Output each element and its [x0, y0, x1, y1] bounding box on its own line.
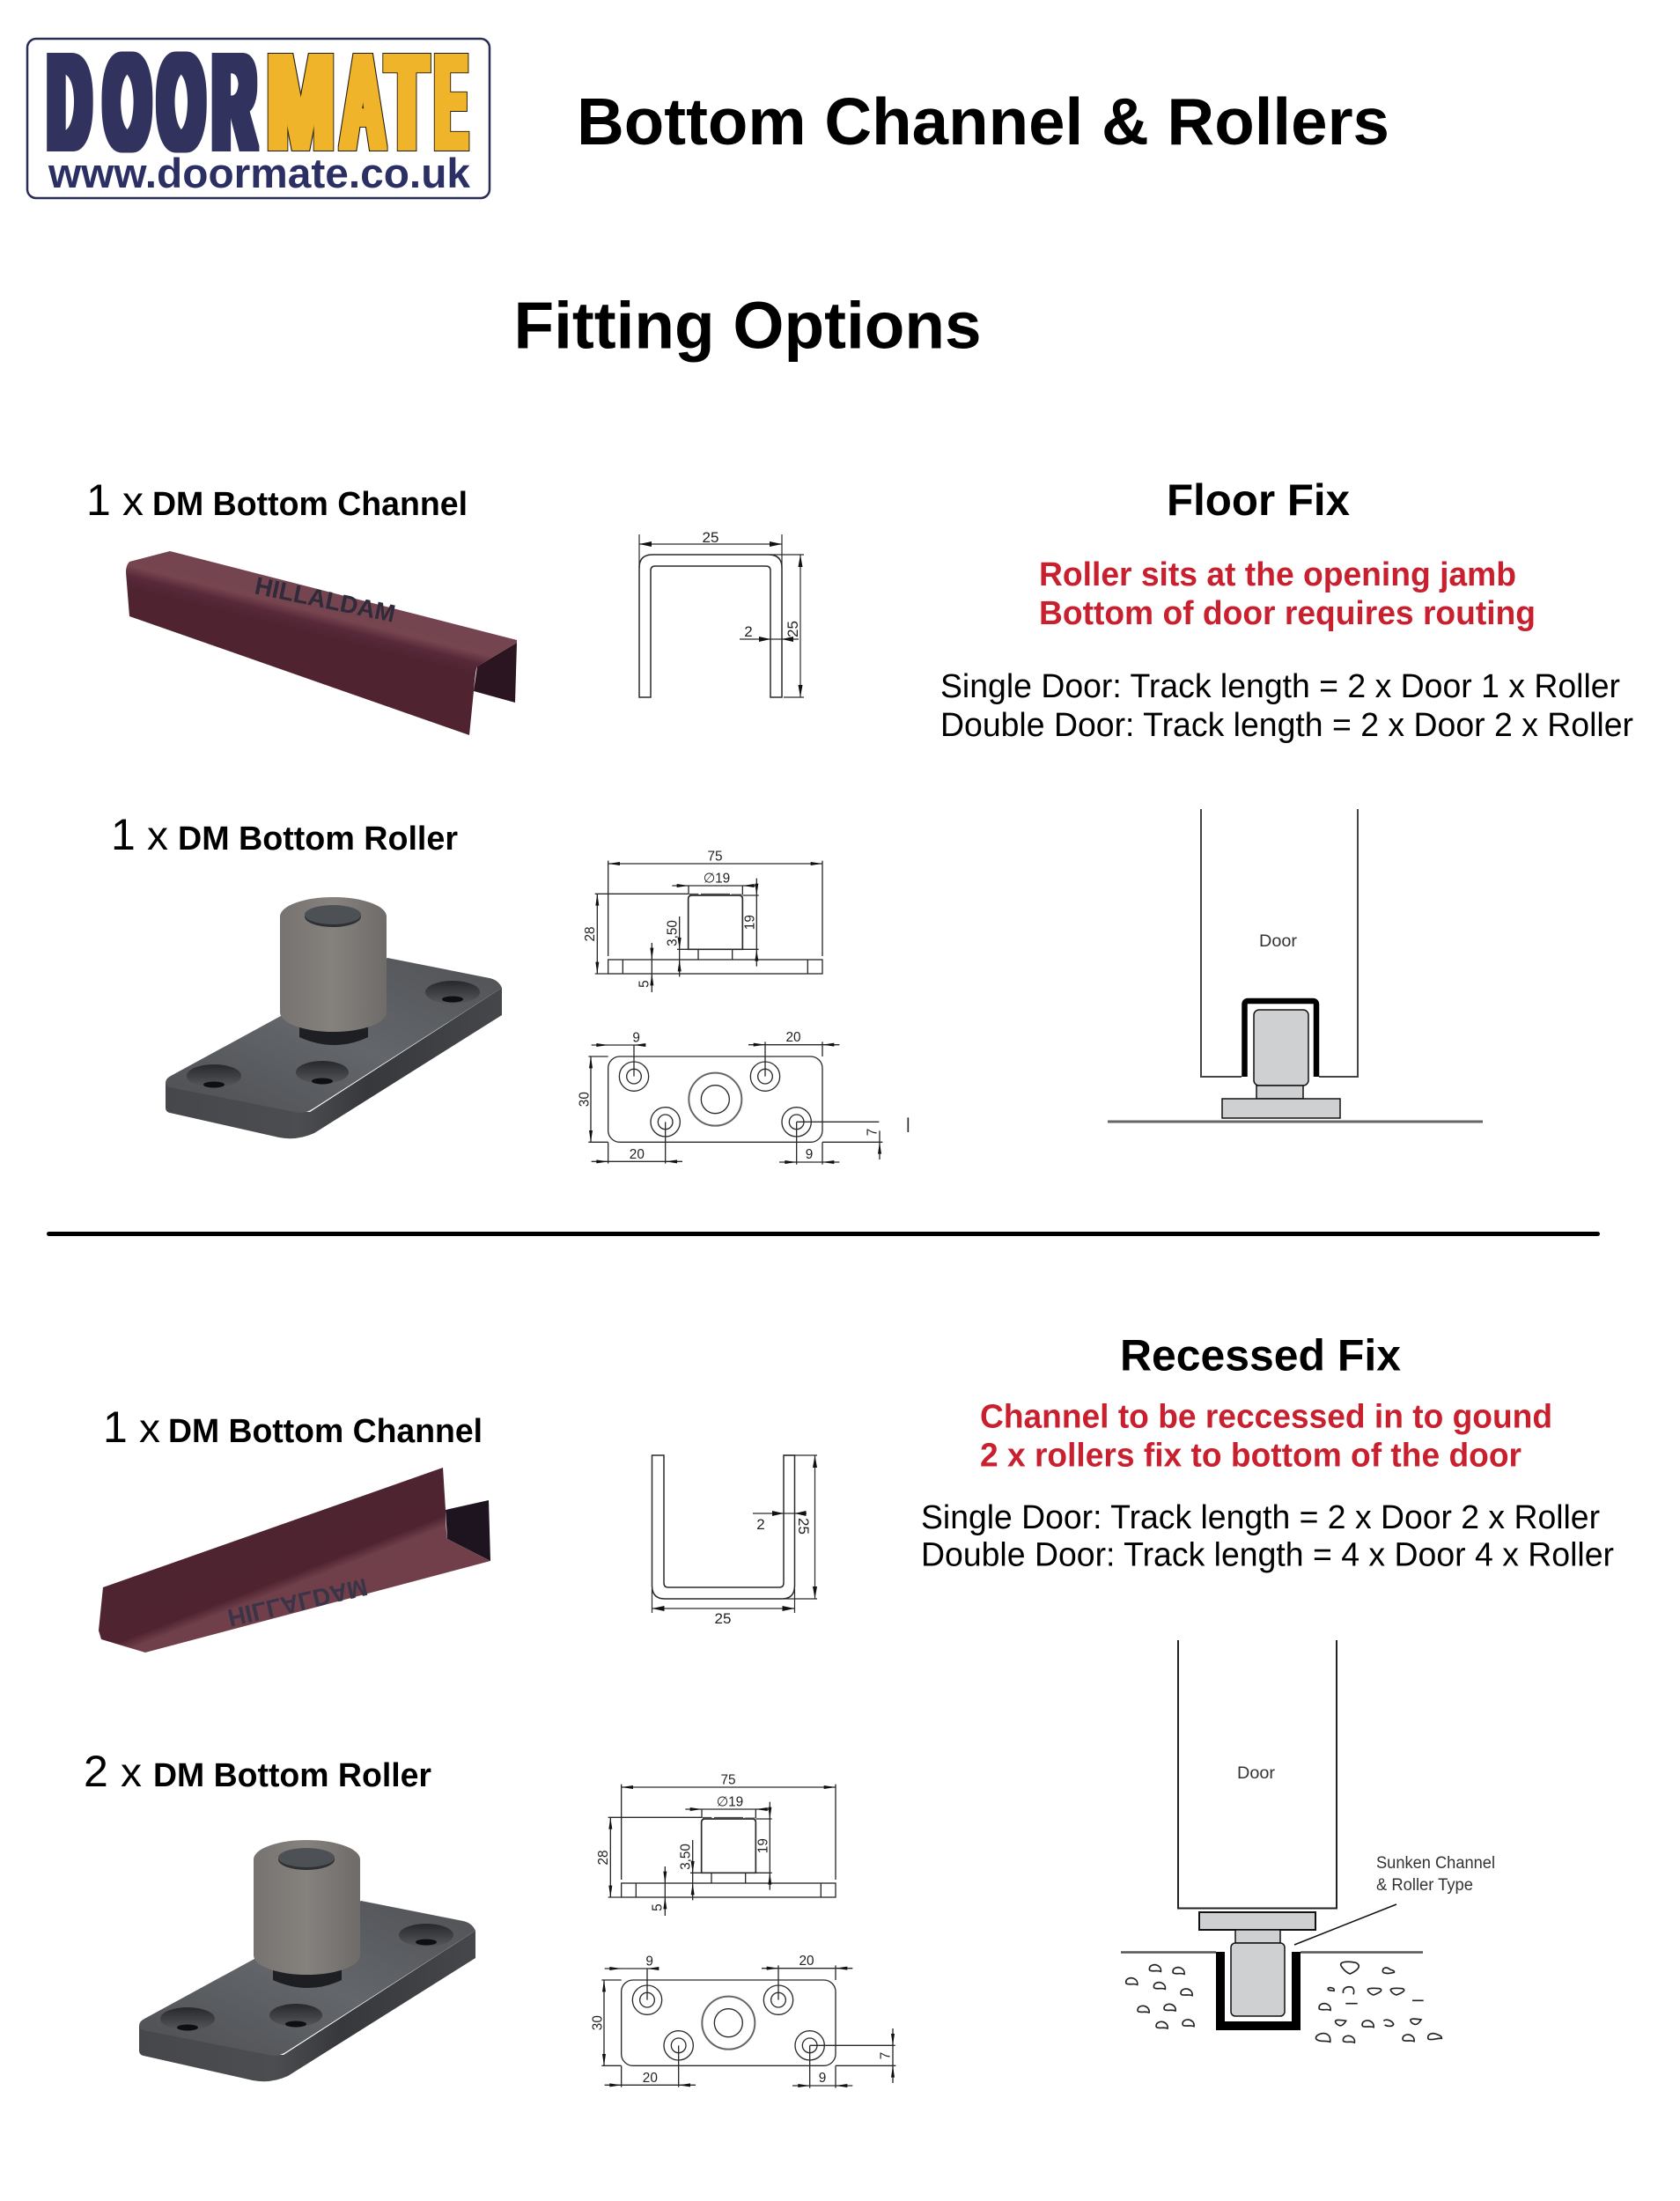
track length notes: Double Door: Track length = 4 x Door 4 x Roller — [921, 1537, 1614, 1574]
channel photo: HILLALDAM — [253, 572, 398, 628]
roller dimension drawings: ∅19 — [717, 1795, 743, 1810]
roller dimension drawings: 9 — [632, 1031, 640, 1046]
red notes: Channel to be reccessed in to gound — [980, 1398, 1552, 1435]
roller dimension drawings: 3,50 — [678, 1844, 693, 1870]
roller dimension drawings: 3,50 — [665, 920, 680, 946]
label: 1 x DM Bottom Channel: DM Bottom Channel — [152, 486, 468, 523]
channel photo: HILLALDAM — [225, 1573, 370, 1631]
heading: recessed fix: Recessed Fix — [1120, 1331, 1401, 1380]
roller dimension drawings: 30 — [590, 2015, 605, 2030]
logo word: MATE: T — [387, 26, 427, 178]
roller dimension drawings: 20 — [630, 1147, 645, 1162]
logo url: www.doormate.co.uk — [48, 150, 471, 196]
roller dimension drawings: 20 — [785, 1030, 801, 1045]
heading: floor fix: Floor Fix — [1167, 475, 1350, 525]
panel: recessed fix parts — [84, 1402, 895, 2088]
roller dimension drawings: 75 — [707, 850, 723, 865]
label: 1 x DM Bottom Channel — [86, 475, 468, 525]
roller dimension drawings: 5 — [637, 980, 652, 988]
roller dimension drawings: 19 — [742, 915, 757, 930]
label: 1 x DM Bottom Roller — [111, 810, 458, 859]
panel: floor fix description — [940, 475, 1633, 1122]
roller dimension drawings: 9 — [819, 2071, 826, 2086]
label: 1 x DM Bottom Channel: 1 — [103, 1402, 128, 1452]
roller dimension drawings: 19 — [755, 1838, 770, 1853]
label: 1 x DM Bottom Roller: x — [147, 813, 168, 858]
ground pebbles — [1126, 1962, 1441, 2043]
label: 2 x DM Bottom Roller: x — [121, 1749, 142, 1795]
title: Bottom Channel & Rollers — [577, 85, 1389, 158]
roller dimension drawings: 28 — [596, 1850, 611, 1866]
red notes — [980, 1398, 1552, 1474]
roller dimension drawings: 9 — [645, 1954, 653, 1969]
channel photo — [99, 1468, 490, 1653]
track length notes: Single Door: Track length = 2 x Door 2 x Roller — [921, 1499, 1600, 1536]
label: 1 x DM Bottom Channel: x — [122, 478, 144, 524]
roller photo — [139, 1840, 475, 2081]
channel section drawing — [639, 529, 804, 697]
channel section drawing: 25 — [715, 1610, 731, 1627]
panel: recessed fix description — [921, 1331, 1614, 2043]
roller dimension drawings: 7 — [866, 1129, 881, 1136]
logo word: MATE: A — [342, 26, 384, 179]
roller dimension drawings: 20 — [799, 1954, 814, 1969]
red notes: Roller sits at the opening jamb — [1039, 556, 1516, 593]
label: 1 x DM Bottom Channel — [103, 1402, 483, 1452]
logo word: MATE: M — [268, 26, 334, 178]
roller dimension drawings: 30 — [577, 1092, 592, 1107]
track length notes — [921, 1499, 1614, 1574]
logo word: MATE — [268, 26, 466, 179]
recessed fix diagram — [1121, 1640, 1495, 2043]
channel section drawing — [652, 1455, 817, 1627]
logo word: MATE: E — [436, 27, 466, 179]
roller dimension drawings: 28 — [583, 926, 598, 942]
red notes: 2 x rollers fix to bottom of the door — [980, 1437, 1522, 1474]
roller photo — [166, 897, 502, 1138]
channel section drawing: 25 — [795, 1518, 812, 1535]
logo — [27, 26, 490, 198]
label: 1 x DM Bottom Roller: DM Bottom Roller — [178, 821, 458, 858]
roller dimension drawings — [577, 850, 908, 1165]
label: 1 x DM Bottom Roller: 1 — [111, 810, 136, 859]
callout: sunken channel — [1376, 1854, 1495, 1895]
roller dimension drawings: 20 — [643, 2071, 658, 2086]
roller dimension drawings: 9 — [806, 1147, 813, 1162]
door label: Door — [1237, 1764, 1276, 1783]
floor fix diagram — [1108, 809, 1483, 1122]
divider — [47, 1232, 1600, 1236]
channel section drawing: 2 — [744, 623, 753, 640]
callout: sunken channel: Sunken Channel — [1376, 1854, 1495, 1873]
roller dimension drawings — [590, 1773, 895, 2088]
track length notes — [940, 668, 1633, 744]
track length notes: Double Door: Track length = 2 x Door 2 x Roller — [940, 707, 1633, 744]
heading: fitting options: Fitting Options — [514, 289, 981, 363]
roller dimension drawings: ∅19 — [704, 872, 730, 887]
label: 2 x DM Bottom Roller: 2 — [84, 1747, 108, 1796]
roller dimension drawings: 5 — [650, 1903, 665, 1911]
door label: Door — [1259, 932, 1298, 951]
label: 1 x DM Bottom Channel: DM Bottom Channel — [168, 1413, 483, 1450]
track length notes: Single Door: Track length = 2 x Door 1 x Roller — [940, 668, 1620, 705]
red notes: Bottom of door requires routing — [1039, 595, 1536, 632]
channel section drawing: 25 — [703, 529, 718, 546]
label: 1 x DM Bottom Channel: 1 — [86, 475, 111, 525]
logo word: DOOR: DOOR — [48, 27, 255, 179]
callout: sunken channel: & Roller Type — [1376, 1876, 1473, 1895]
roller dimension drawings: 7 — [879, 2052, 894, 2059]
panel: floor fix parts — [86, 475, 908, 1165]
label: 1 x DM Bottom Channel: x — [139, 1405, 160, 1451]
channel section drawing: 25 — [785, 621, 801, 637]
channel photo — [126, 551, 517, 735]
channel section drawing: 2 — [756, 1516, 765, 1533]
red notes — [1039, 556, 1536, 632]
label: 2 x DM Bottom Roller — [84, 1747, 431, 1796]
roller dimension drawings: 75 — [720, 1773, 736, 1788]
label: 2 x DM Bottom Roller: DM Bottom Roller — [153, 1757, 431, 1794]
